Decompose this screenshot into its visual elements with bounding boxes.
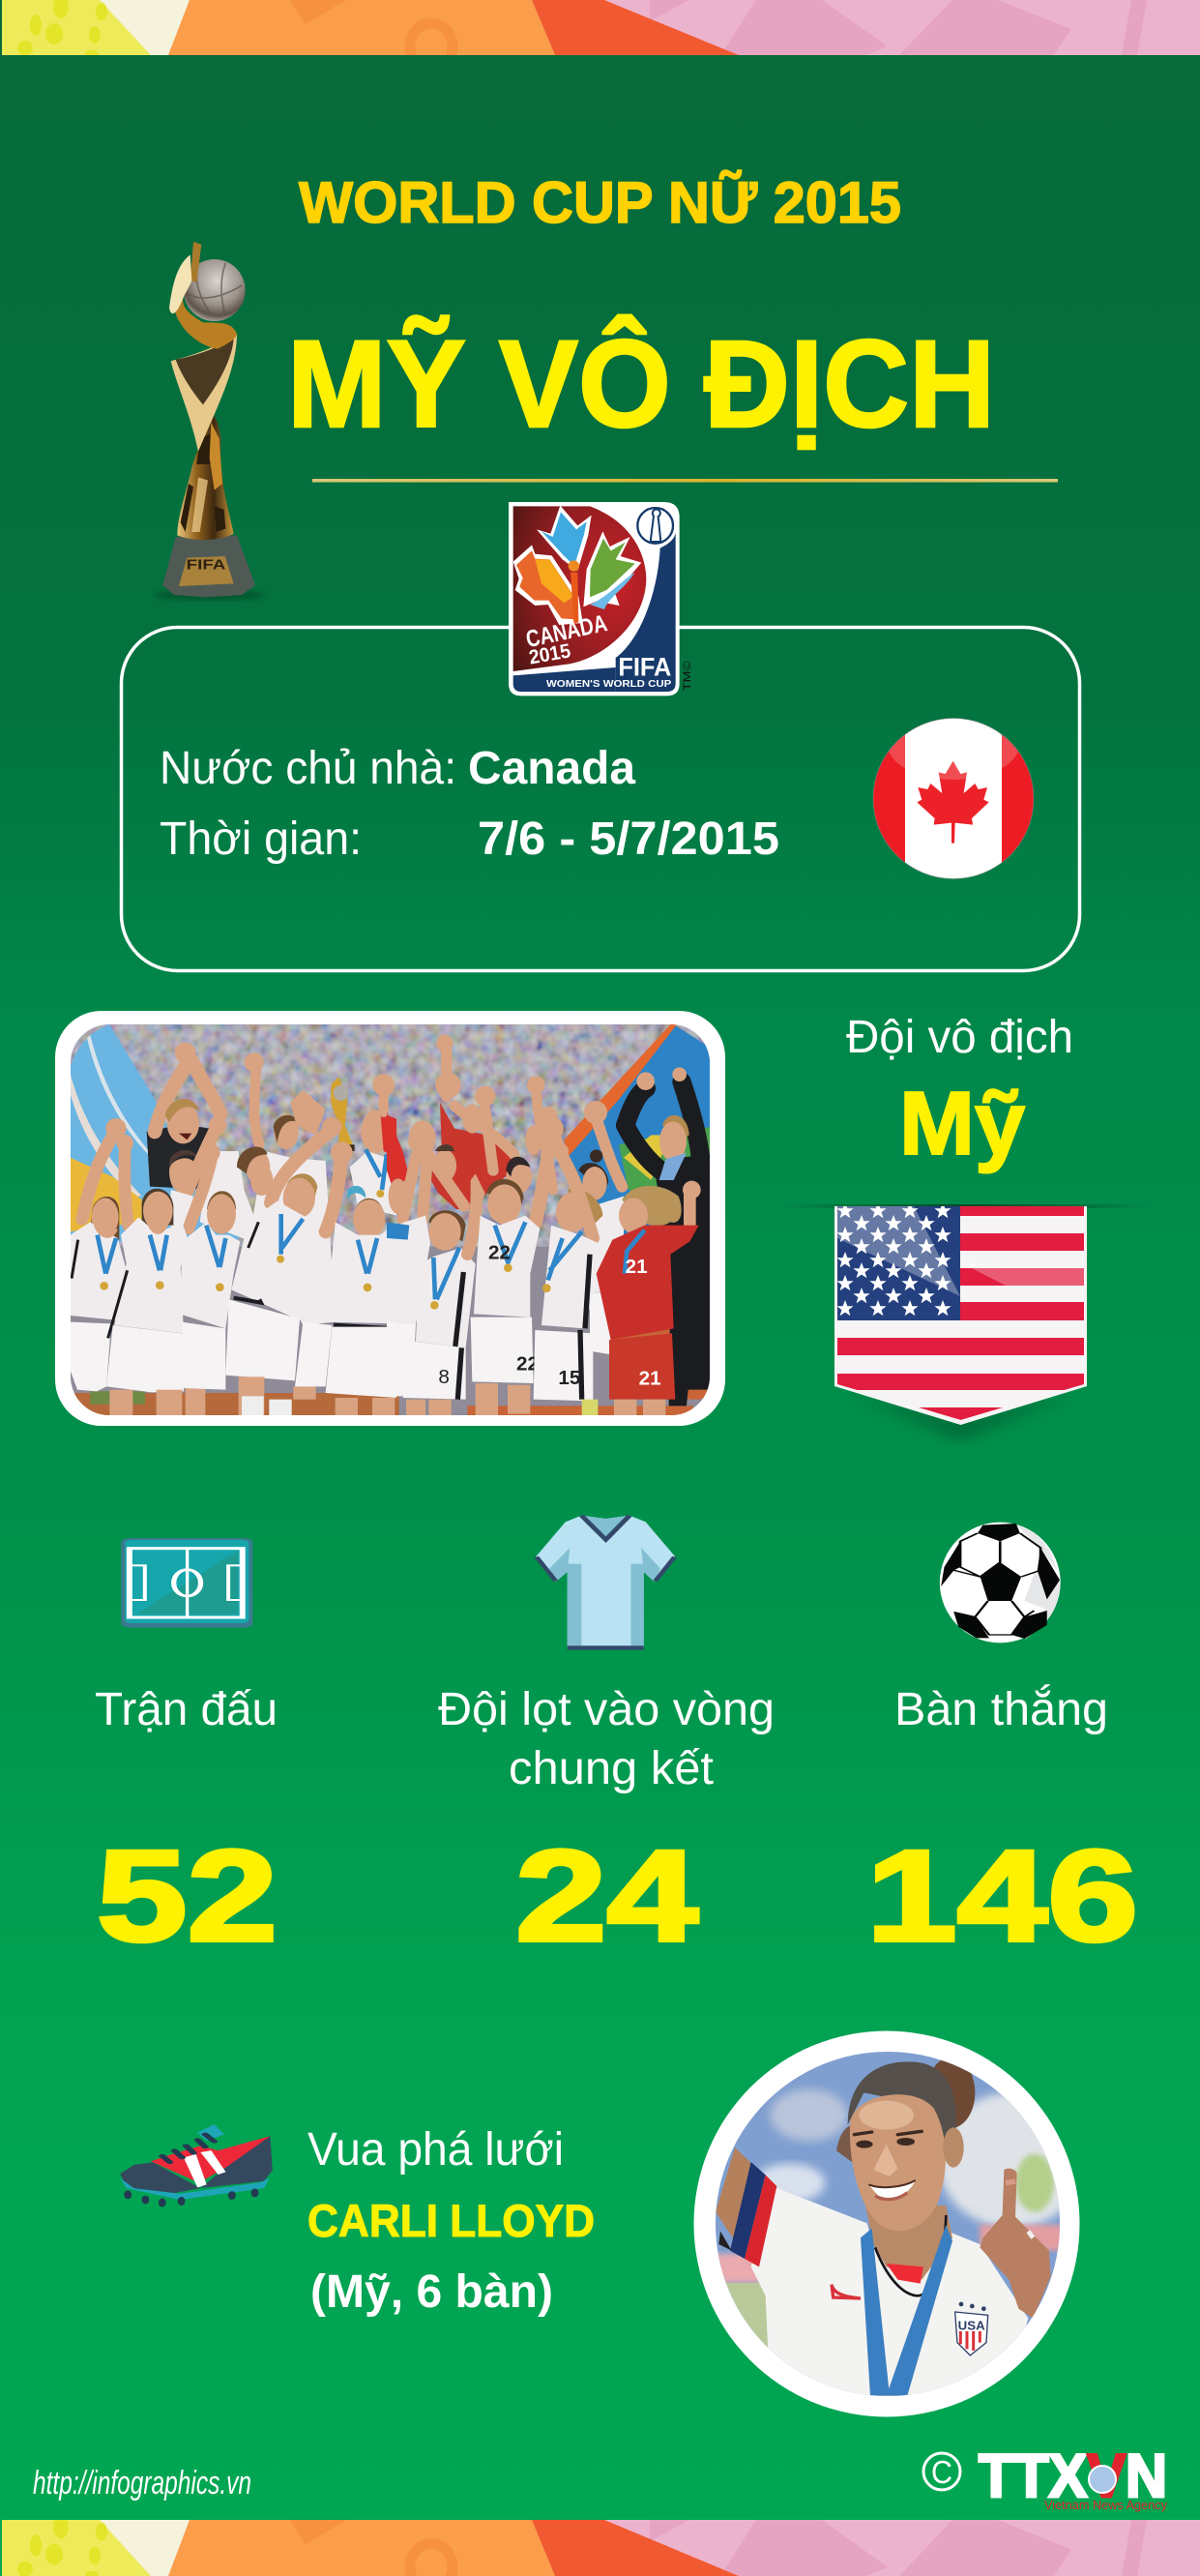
agency wordmark: Vietnam News Agency [1044, 2498, 1167, 2512]
right half of photo: 8 [438, 1366, 450, 1388]
player 4 [271, 1127, 336, 1202]
icon: jersey [536, 1516, 676, 1650]
trophy in photo [331, 1077, 353, 1144]
photo frame [55, 1011, 725, 1426]
host country: Canada [468, 743, 635, 794]
logo: Canada 2015 FIFA Women's World Cup: TM© [682, 661, 693, 691]
player 8 [428, 1210, 466, 1241]
face [850, 2094, 946, 2231]
label: chung kết [509, 1743, 714, 1794]
logo: Canada 2015 FIFA Women's World Cup: WOMEN'S WORLD CUP [546, 679, 672, 690]
top decorative band [2, 0, 1200, 55]
agency wordmark: TTXVN [979, 2443, 1167, 2510]
value: 146 [866, 1824, 1138, 1969]
logo: Canada 2015 FIFA Women's World Cup: FIFA [618, 652, 671, 681]
player 1 [82, 1134, 114, 1219]
shirt [751, 2186, 1028, 2402]
left edge player [403, 1148, 464, 1222]
dates [160, 814, 779, 865]
stat: finalist teams [438, 1516, 775, 1969]
top scorer text [307, 2124, 595, 2318]
logo: Canada 2015 FIFA Women's World Cup: CANADA [524, 610, 610, 653]
player 5 [356, 1198, 383, 1210]
icon: football pitch [121, 1538, 252, 1628]
right half of photo: 15 [558, 1367, 580, 1389]
gold divider [312, 479, 1058, 482]
icon: US flag ribbon [803, 1204, 1129, 1443]
left half of photo [71, 1024, 399, 1420]
copyright mark [923, 2453, 960, 2490]
info panel: host country and dates [122, 627, 1079, 971]
red players at back [427, 1103, 515, 1209]
dates: 7/6 - 5/7/2015 [478, 814, 779, 865]
bottom decorative band [2, 2515, 1200, 2576]
icon: football boot [120, 2124, 273, 2206]
label: Đội lọt vào vòng [438, 1684, 775, 1735]
portrait: Carli Lloyd [694, 2031, 1086, 2416]
logo: Canada 2015 FIFA Women's World Cup [509, 502, 693, 696]
neck and collar [865, 2206, 952, 2280]
icon: Canada flag button [873, 710, 1034, 880]
label: Bàn thắng [894, 1683, 1108, 1735]
label: Trận đấu [95, 1684, 278, 1735]
hair [934, 2060, 975, 2128]
champion name: Mỹ [899, 1073, 1025, 1173]
right half of photo: 21 [639, 1368, 661, 1390]
label [438, 1684, 775, 1794]
stat: matches [95, 1538, 278, 1969]
source link: http://infographics.vn [33, 2465, 251, 2502]
coach in black [655, 1154, 711, 1406]
top scorer text: Vua phá lưới [307, 2124, 564, 2176]
right half of photo: 22 [516, 1353, 539, 1376]
copyright mark: C [931, 2454, 952, 2490]
hand with raised finger [980, 2169, 1051, 2319]
panel outline [122, 627, 1079, 971]
value: 24 [515, 1824, 698, 1969]
goalkeeper in red [622, 1186, 682, 1226]
value: 52 [97, 1824, 278, 1969]
crest [955, 2312, 988, 2355]
right half of photo: 21 [626, 1256, 648, 1278]
medal ribbons [861, 2228, 890, 2396]
scorer detail: (Mỹ, 6 bàn) [310, 2266, 553, 2318]
title: World Cup Nữ 2015: WORLD CUP NỮ 2015 [299, 170, 901, 235]
right half of photo: 22 [488, 1242, 511, 1264]
portrait: Carli Lloyd: USA [958, 2319, 985, 2332]
scorer name: CARLI LLOYD [307, 2195, 595, 2246]
host country: Nước chủ nhà: [160, 743, 456, 794]
player 3 [207, 1191, 236, 1209]
logo: Canada 2015 FIFA Women's World Cup: 2015 [527, 639, 572, 669]
icon: World Cup trophy [155, 242, 264, 601]
headline: Mỹ vô địch: MỸ VÔ ĐỊCH [287, 315, 995, 454]
coach in black [147, 1127, 209, 1189]
player 22 [467, 1193, 477, 1255]
label: champion team [846, 1012, 1073, 1173]
player 15 [568, 1188, 602, 1226]
label: champion team: Đội vô địch [846, 1012, 1073, 1063]
right half of photo [387, 1024, 711, 1419]
back right player [590, 1197, 624, 1293]
player 2 [125, 1144, 129, 1226]
dates: Thời gian: [160, 814, 362, 865]
team photo illustration [71, 1024, 711, 1420]
icon: World Cup trophy: FIFA [187, 558, 226, 574]
icon: football [940, 1523, 1061, 1643]
photo panel: US team celebrating [55, 1011, 725, 1426]
host country [160, 743, 635, 794]
stat: goals [866, 1523, 1138, 1969]
logo: TTXVN copyright [923, 2443, 1167, 2512]
back players [251, 1151, 336, 1325]
